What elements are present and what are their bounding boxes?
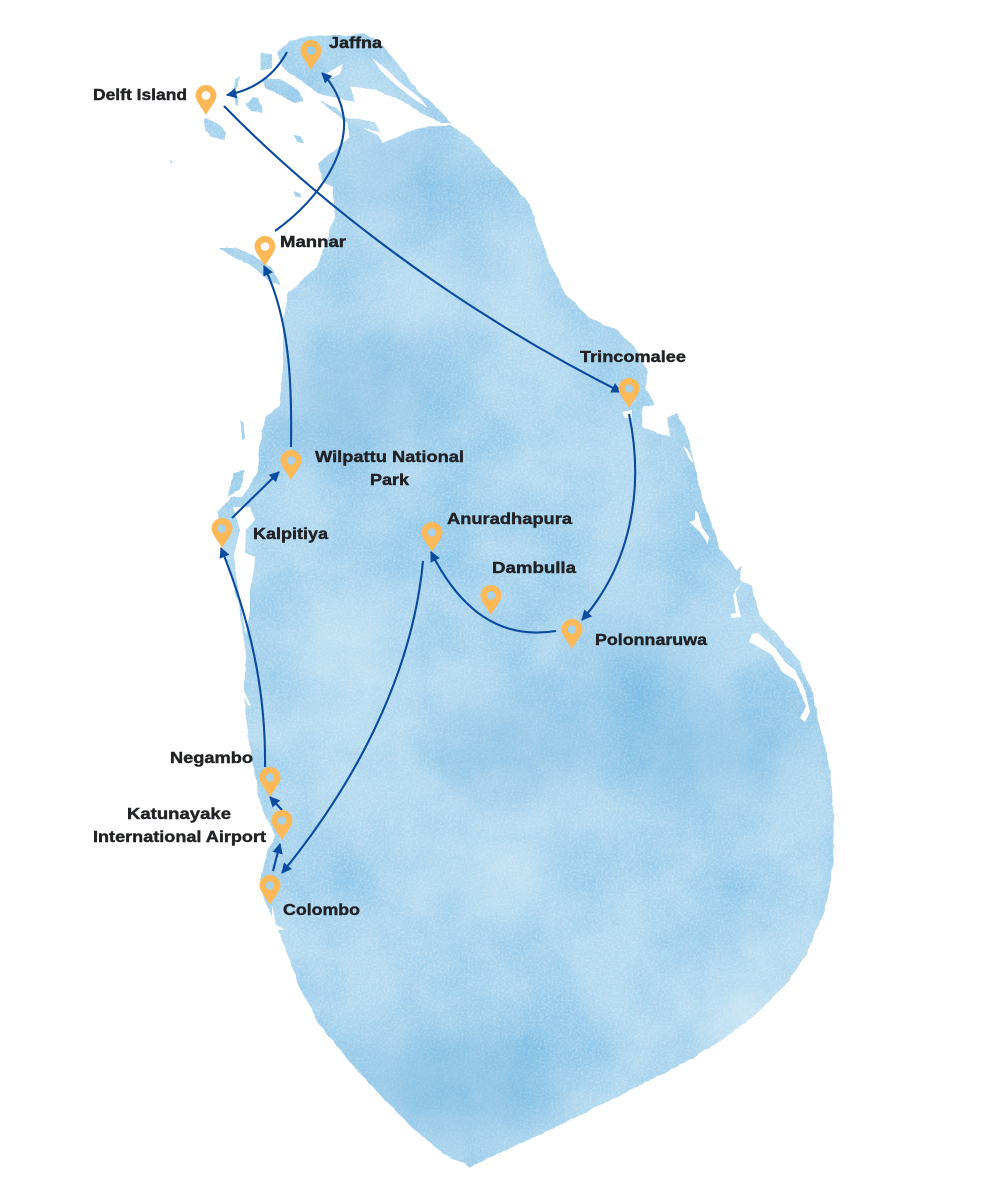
pin: Colombo: [260, 875, 280, 905]
label: Mannar: Mannar: [280, 234, 346, 251]
mainland: [218, 120, 834, 1167]
label: Negambo: Negambo: [170, 750, 253, 767]
label: Trincomalee: Trincomalee: [580, 349, 686, 366]
pin: Wilpattu National Park: [280, 450, 302, 480]
label: Delft Island: Delft Island: [93, 87, 187, 104]
arrow: Polonnaruwa to Anuradhapura: [431, 552, 556, 633]
arrow: Delft Island to Trincomalee: [224, 106, 621, 392]
pin: Mannar: [254, 236, 276, 266]
label: Katunayake International Airport: Katunayake: [127, 806, 231, 823]
arrow: Negambo to Kalpitiya: [221, 548, 265, 767]
label: Jaffna: Jaffna: [329, 35, 382, 52]
Delft island: [205, 118, 226, 140]
pin: Negambo: [260, 767, 280, 797]
Kayts islands: [234, 53, 303, 113]
label: Wilpattu National Park: Park: [370, 472, 409, 489]
label: Katunayake International Airport: International Airport: [93, 829, 267, 846]
label: Polonnaruwa: Polonnaruwa: [595, 632, 707, 649]
label: Wilpattu National Park: [315, 449, 464, 489]
label: Katunayake International Airport: [93, 806, 267, 846]
small islets: [170, 135, 304, 497]
pin: Delft Island: [196, 85, 216, 115]
arrow: Colombo to Katunayake: [273, 844, 280, 871]
label: Wilpattu National Park: Wilpattu National: [315, 449, 464, 466]
label: Colombo: Colombo: [283, 902, 360, 919]
label: Anuradhapura: Anuradhapura: [447, 511, 572, 528]
pin: Anuradhapura: [422, 522, 442, 552]
arrow: Katunayake to Negambo: [270, 797, 282, 810]
arrow: Kalpitiya to Wilpattu: [232, 472, 279, 518]
pin: Dambulla: [480, 585, 502, 615]
arrow: Jaffna to Delft Island: [227, 52, 287, 95]
lagoon link islands: [320, 101, 380, 132]
pin: Polonnaruwa: [562, 619, 582, 649]
pin: Kalpitiya: [212, 518, 232, 548]
Jaffna peninsula: [277, 33, 452, 124]
map: Sri Lanka watercolor landmass: [170, 33, 834, 1167]
label: Dambulla: Dambulla: [492, 560, 576, 577]
arrow: Anuradhapura to Colombo: [282, 561, 423, 873]
Mannar island: [218, 248, 281, 285]
lagoons: [233, 58, 810, 930]
arrow: Wilpattu to Mannar: [264, 266, 291, 447]
pin: Trincomalee: [618, 378, 640, 408]
pin: Katunayake International Airport: [272, 810, 292, 840]
arrow: Mannar to Jaffna: [275, 73, 344, 231]
pin: Jaffna: [300, 40, 322, 70]
label: Kalpitiya: Kalpitiya: [253, 526, 328, 543]
watercolor shading: [280, 140, 820, 1140]
arrow: Trincomalee to Polonnaruwa: [582, 414, 635, 620]
route arrows: [221, 52, 635, 873]
